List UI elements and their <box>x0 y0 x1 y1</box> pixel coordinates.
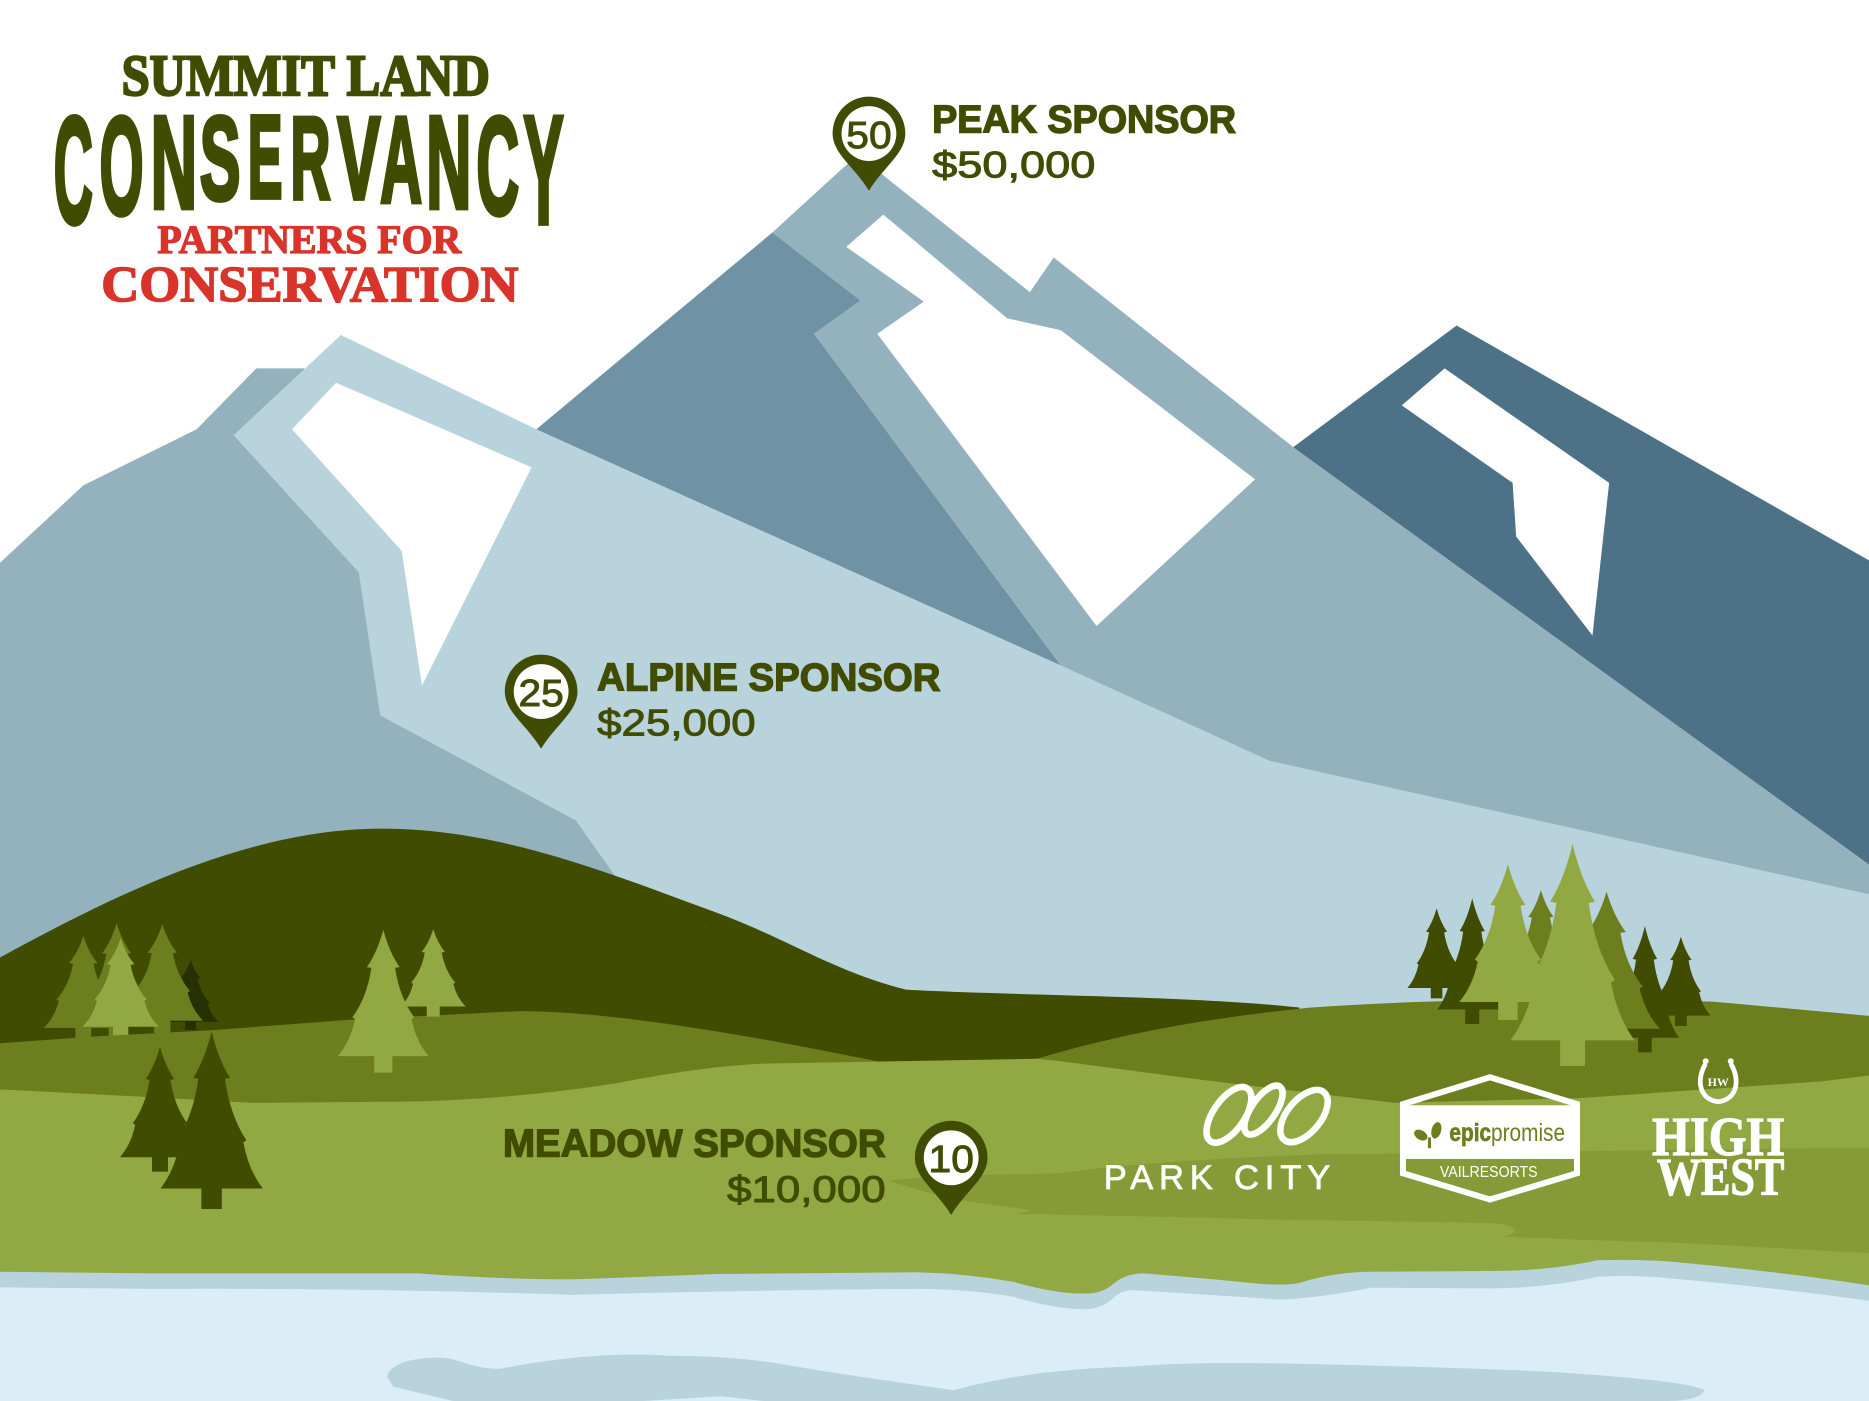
tree: large light <box>338 930 429 1073</box>
title: CONSERVANCY: N <box>426 89 471 237</box>
foreground meadow shading <box>888 1148 1869 1253</box>
High wordmark: HIGH <box>1652 1106 1784 1167</box>
infographic canvas: Y <box>523 84 564 257</box>
snow cap: central peak <box>846 215 1255 626</box>
title: CONSERVANCY: V <box>337 93 380 224</box>
Park City mark <box>1198 1080 1337 1151</box>
snow cap: far right mountain <box>1402 368 1609 636</box>
horseshoe icon: HW <box>1708 1075 1729 1089</box>
Vail Resorts wordmark: VAILRESORTS <box>1440 1164 1538 1181</box>
meadow sponsor <box>503 1121 988 1215</box>
epic promise wordmark: epicpromise <box>1449 1119 1565 1147</box>
icon: pin 10: 10 <box>929 1138 974 1181</box>
tree: light front <box>82 938 159 1038</box>
title: CONSERVANCY: N <box>151 89 197 237</box>
lake <box>0 1260 1869 1401</box>
title: CONSERVANCY: C <box>54 86 93 256</box>
title: CONSERVANCY: E <box>248 91 282 223</box>
tree: olive small center <box>1506 890 1576 993</box>
mountain range <box>0 155 1869 1073</box>
title: CONSERVANCY: R <box>290 93 330 224</box>
icon: pin 25: 25 <box>519 672 564 715</box>
Park City wordmark: PARK CITY <box>1104 1159 1330 1197</box>
amount: $10,000: $10,000 <box>727 1169 886 1210</box>
icon: pin 50 <box>833 97 905 191</box>
icon: pin 25 <box>505 655 578 749</box>
title: SUMMIT LAND: SUMMIT LAND <box>122 43 490 108</box>
label: MEADOW SPONSOR: MEADOW SPONSOR <box>503 1122 886 1166</box>
leaf icon <box>1412 1121 1443 1148</box>
bright green foreground <box>0 1059 1869 1294</box>
tree: light big center <box>1510 844 1635 1066</box>
left distant mountain <box>0 368 691 1073</box>
center pair of light trees <box>338 929 466 1073</box>
mountain reflection <box>387 1355 1705 1401</box>
horseshoe icon <box>1700 1058 1736 1102</box>
left tree cluster on hill <box>44 923 218 1040</box>
icon: pin 50: 50 <box>846 114 892 157</box>
tree: dark rear <box>120 1047 200 1172</box>
peak sponsor <box>833 97 1236 191</box>
icon: pin 10 <box>915 1121 988 1215</box>
title block <box>54 43 564 314</box>
tree: shadow dark <box>163 960 218 1030</box>
shoreline band <box>0 1260 1869 1401</box>
central peak mountain <box>772 155 1869 918</box>
tree: olive left <box>44 936 123 1040</box>
tree: small light <box>401 929 466 1017</box>
subtitle: PARTNERS FOR: PARTNERS FOR <box>157 217 462 262</box>
amount: $25,000: $25,000 <box>597 703 756 744</box>
title: CONSERVANCY: C <box>476 88 519 244</box>
tree: dark far right <box>1651 937 1710 1026</box>
title: CONSERVANCY: S <box>200 93 240 226</box>
central shaded mountain <box>536 233 1061 715</box>
title: CONSERVANCY: A <box>380 92 422 229</box>
West wordmark: WEST <box>1657 1149 1784 1207</box>
tree: olive rear <box>77 923 157 1038</box>
mid green meadow <box>0 1000 1869 1192</box>
hexagon badge <box>1403 1077 1577 1199</box>
label: PEAK SPONSOR: PEAK SPONSOR <box>932 97 1236 141</box>
tree: dark front <box>160 1032 263 1209</box>
tree: light left <box>1459 864 1557 1020</box>
logo: Epic Promise <box>1402 1077 1578 1199</box>
label: ALPINE SPONSOR: ALPINE SPONSOR <box>597 655 940 699</box>
amount: $50,000: $50,000 <box>932 145 1095 186</box>
tree: olive rear right <box>121 924 203 1033</box>
front dark pine pair <box>120 1032 263 1209</box>
far right dark mountain <box>1293 326 1869 1073</box>
logo: Park City <box>1104 1080 1337 1197</box>
front pale mountain <box>234 335 1869 1073</box>
title: CONSERVANCY: O <box>100 88 144 244</box>
alpine sponsor <box>505 655 940 749</box>
subtitle: CONSERVATION: CONSERVATION <box>101 257 519 314</box>
dark green hill <box>0 829 1299 1097</box>
tree: dark left <box>1437 898 1507 1024</box>
tree: olive big <box>1553 892 1660 1047</box>
snow cap: front mountain <box>292 383 532 686</box>
tree: dark far left <box>1407 908 1466 998</box>
lake water <box>0 1276 1869 1401</box>
logo: High West <box>1652 1058 1784 1207</box>
right tree cluster <box>1407 844 1710 1066</box>
white panel <box>1402 1105 1578 1159</box>
tree: dark right <box>1611 926 1679 1052</box>
